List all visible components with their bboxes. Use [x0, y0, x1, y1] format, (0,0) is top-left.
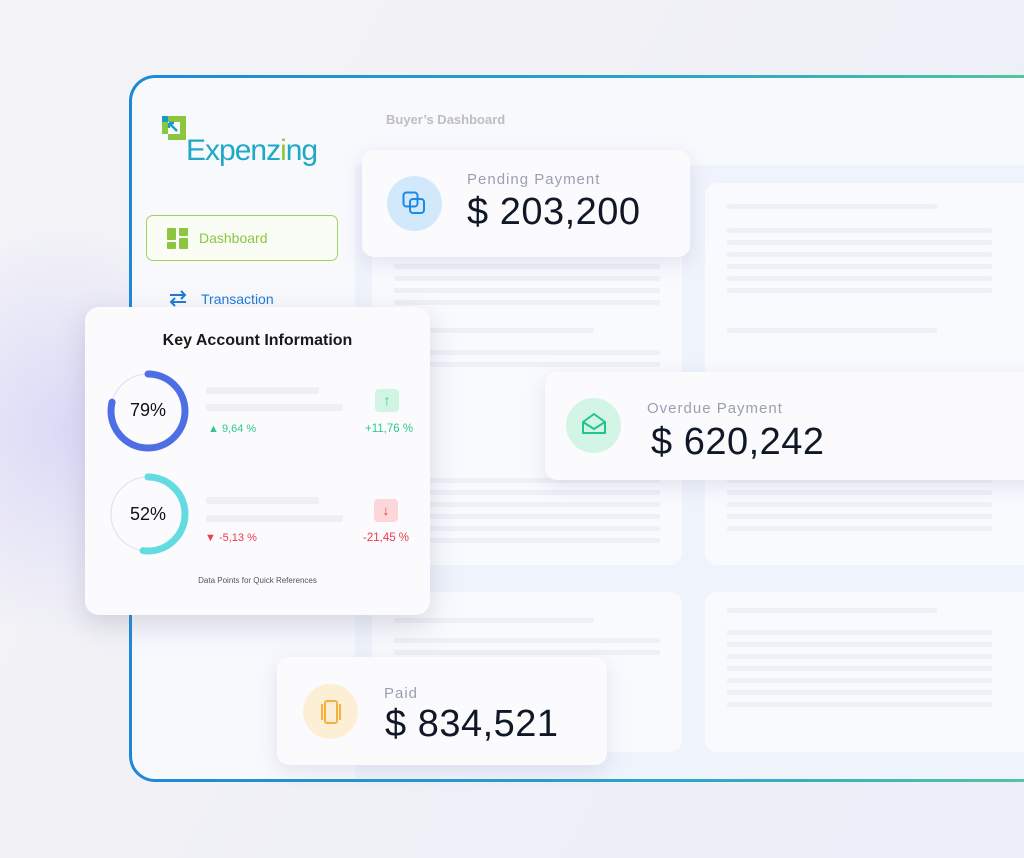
caption: Data Points for Quick References	[198, 576, 317, 585]
donut 52%: 52%	[130, 504, 166, 524]
nav: Transaction: Transaction	[201, 291, 274, 307]
icon: logo mark	[162, 116, 186, 140]
placeholder panels	[372, 183, 682, 565]
background glow	[0, 220, 240, 640]
card: Overdue Payment: Overdue Payment	[647, 400, 783, 417]
card: Pending Payment: Pending Payment	[467, 171, 600, 188]
heading: Buyer's Dashboard: Buyer’s Dashboard	[386, 112, 505, 127]
card: Paid	[277, 657, 607, 765]
icon: cards	[303, 684, 358, 739]
card: Overdue Payment: $ 620,242	[651, 421, 825, 463]
nav: Dashboard: Dashboard	[199, 230, 268, 246]
logo text: Expenzing	[186, 134, 317, 167]
stat: 9,64: ▲ 9,64 %	[208, 423, 256, 435]
card: Pending Payment	[362, 150, 690, 257]
nav: Dashboard	[146, 215, 338, 261]
stat: -5,13: ▼ -5,13 %	[205, 532, 257, 544]
icon: grid	[167, 228, 188, 249]
donut 52%	[110, 474, 188, 554]
donut 79%: 79%	[130, 400, 166, 420]
dashboard frame	[129, 75, 1024, 782]
icon: down arrow: ↓	[382, 502, 390, 518]
logo	[162, 116, 317, 167]
card: Pending Payment: $ 203,200	[467, 191, 641, 233]
panel: Key Account Information: -21,45 %	[363, 532, 409, 544]
nav: Transaction	[170, 290, 274, 307]
icon: up arrow	[375, 389, 399, 412]
card: Paid: Paid	[384, 685, 418, 702]
card: Overdue Payment	[545, 372, 1024, 480]
title: Key Account Information	[163, 332, 352, 349]
content area	[355, 165, 1024, 795]
panel: Key Account Information: +11,76 %	[365, 423, 413, 435]
panel: Key Account Information	[85, 307, 430, 615]
donut 79%	[108, 370, 188, 452]
icon: envelope	[566, 398, 621, 453]
icon: copy	[387, 176, 442, 231]
icon: down arrow	[374, 499, 398, 522]
icon: up arrow: ↑	[384, 392, 390, 408]
card: Paid: $ 834,521	[385, 703, 559, 745]
